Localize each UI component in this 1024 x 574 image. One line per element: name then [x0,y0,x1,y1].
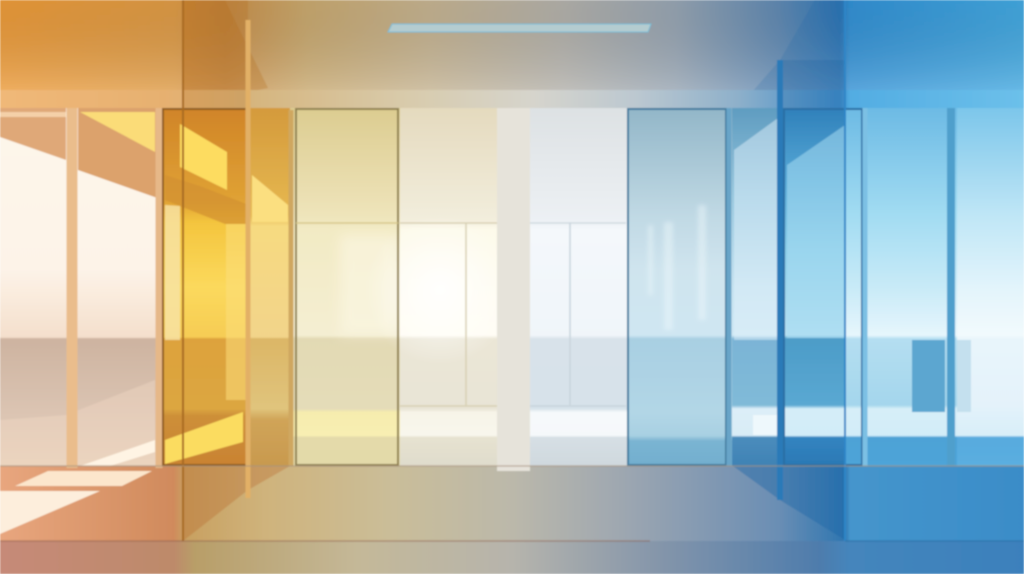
sunlight patches on floor [15,471,152,486]
central white column [497,108,530,471]
blue glass sheet [780,60,845,108]
ceiling light panel [388,24,651,32]
gold glass panel [163,108,249,466]
floor [0,466,1024,574]
yellow glass panel [290,108,400,466]
window glow [365,215,515,365]
ceiling beam [0,90,1024,109]
white window [530,108,628,466]
mid blue glass panel [845,108,957,466]
pale right window [957,108,1024,466]
deep blue glass panel [785,108,845,466]
amber glass panel [249,108,290,466]
ceiling [0,0,1024,92]
blue glass panel left [732,108,785,466]
left windows [0,108,163,466]
orange glass sheet [183,0,248,108]
cream window [400,108,497,466]
pale blue glass panel [628,108,732,466]
